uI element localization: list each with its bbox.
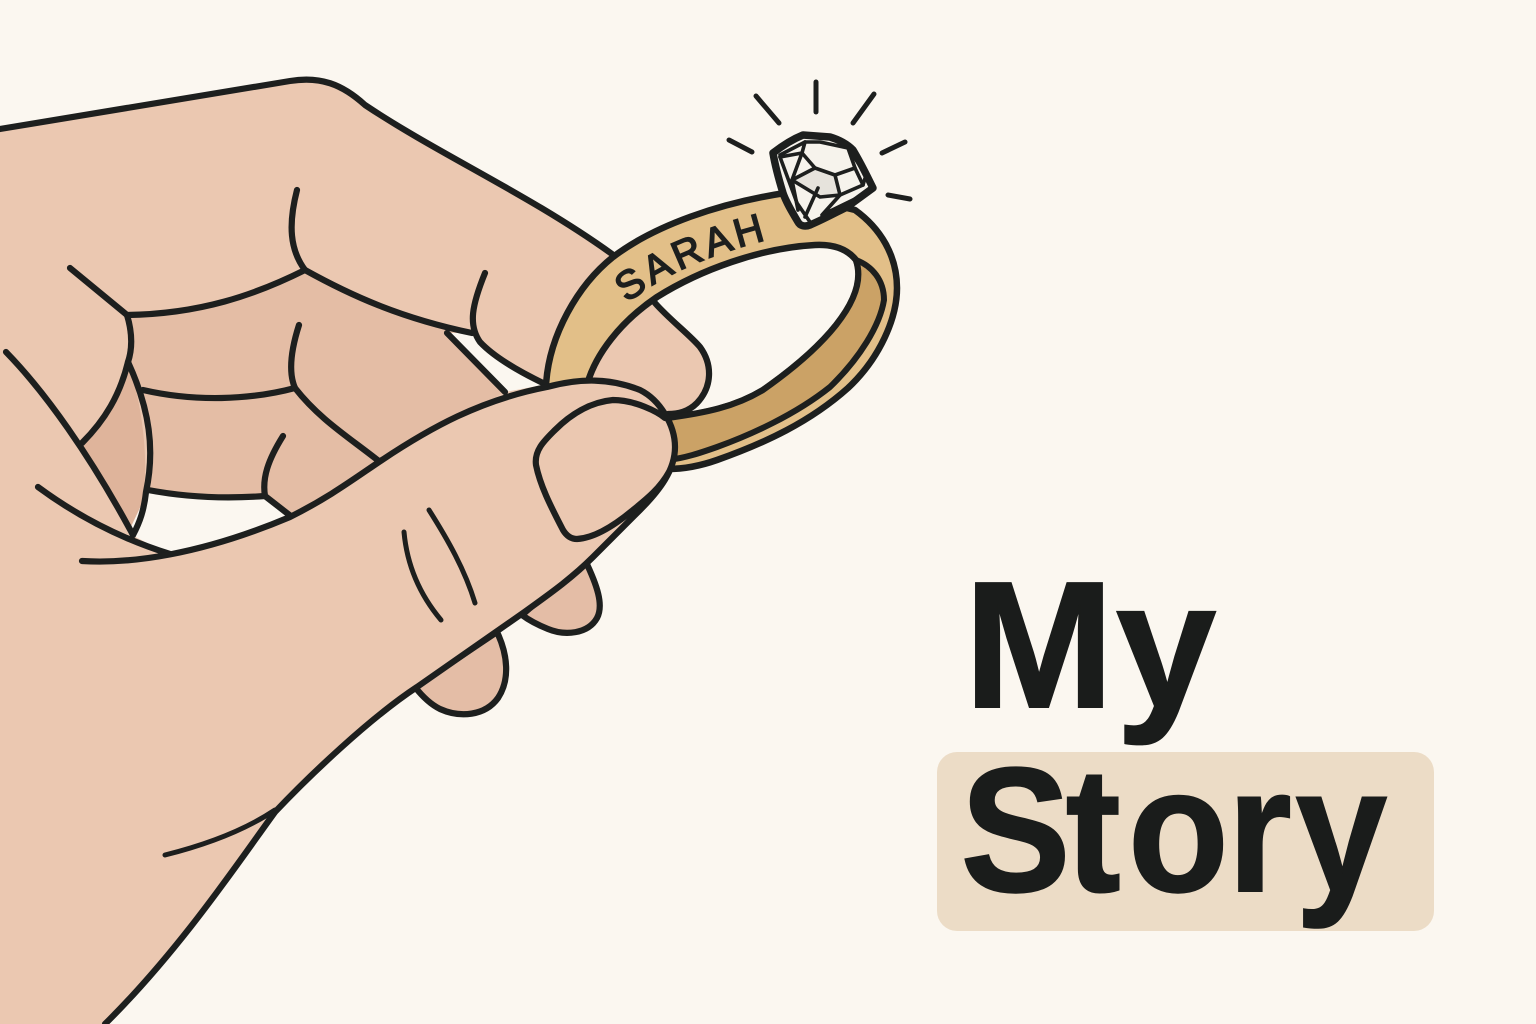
title highlight box: [937, 752, 1434, 931]
diamond shading: [792, 168, 842, 197]
icon: sparkle rays: [729, 82, 910, 199]
icon: diamond: [773, 135, 873, 226]
lower thumb crease: [404, 532, 441, 620]
icon: back fingertips below thumb: [415, 560, 600, 714]
finger creases and palm lines: [6, 190, 545, 554]
title: My: My: [964, 545, 1216, 746]
thumbnail: [536, 400, 669, 539]
cream gap in palm: [128, 491, 292, 556]
shaded palm triangle: [82, 360, 145, 532]
ring band: [546, 193, 897, 469]
engraved name: SARAH: [616, 213, 764, 300]
hand top outline and index fingertip: [0, 80, 612, 254]
icon: hand and fingers: [0, 80, 709, 1024]
cream gap near ring: [447, 333, 548, 392]
icon: thumb: [0, 381, 675, 1024]
title: Story: Story: [961, 732, 1387, 929]
diamond facets: [780, 142, 866, 222]
thumb creases: [429, 510, 475, 603]
thumb skin: [0, 381, 675, 1024]
icon: gold ring with engraving: [543, 190, 900, 472]
wrist crease: [165, 810, 275, 855]
thumb outline: [82, 381, 675, 1024]
hand base skin: [0, 80, 709, 1024]
shaded middle fingers: [128, 270, 505, 517]
ring inner surface: [668, 260, 884, 460]
